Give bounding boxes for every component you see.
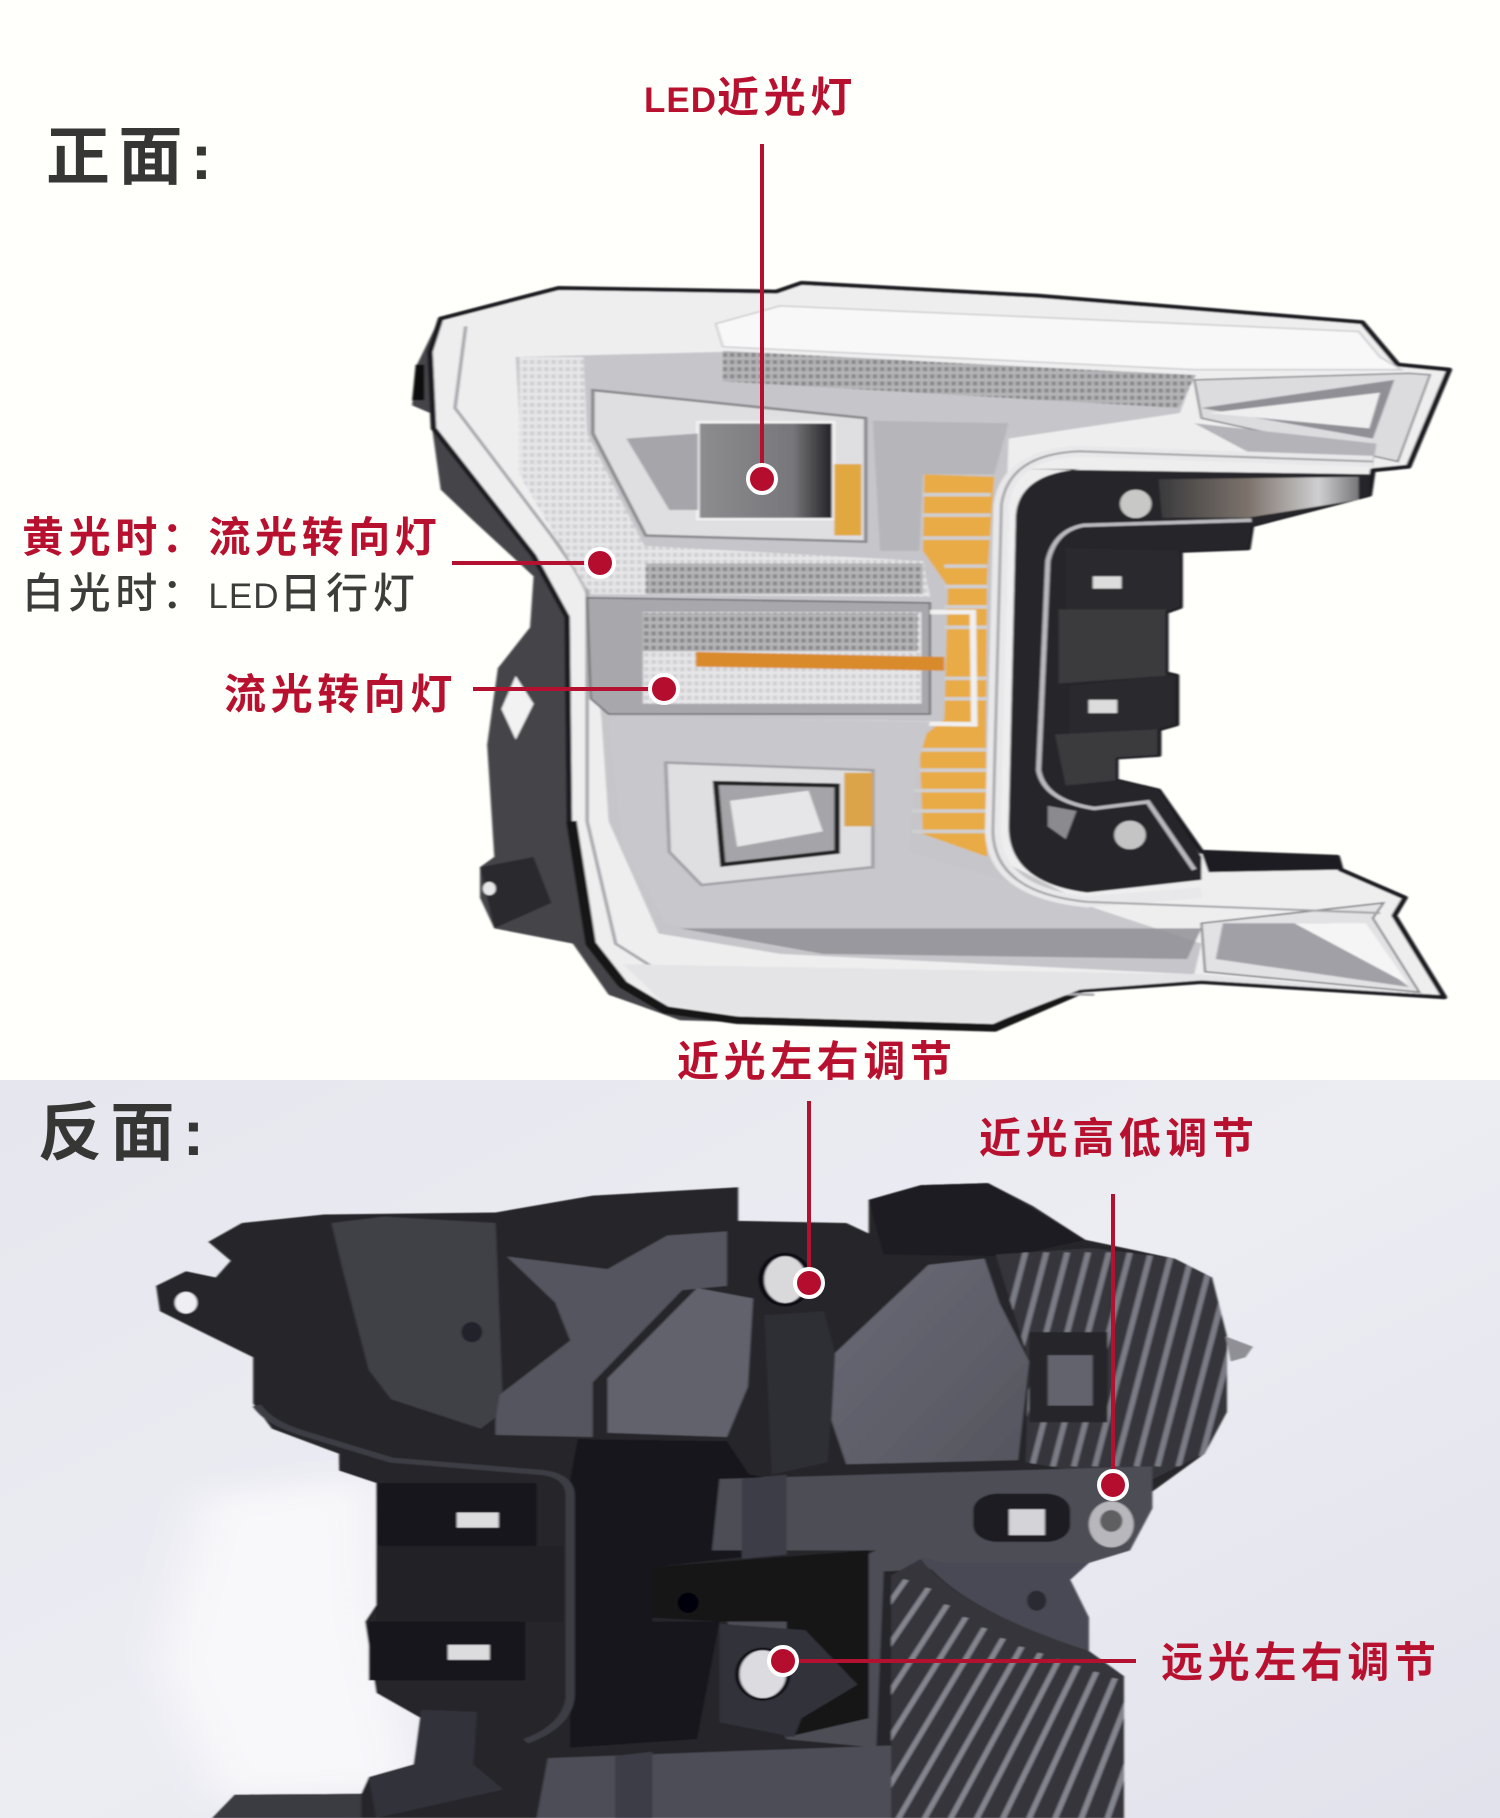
center-left panel (496, 1231, 727, 1437)
lower fine strip (680, 928, 1201, 959)
black mounting clip, lower (1069, 676, 1174, 734)
white tab, upper (457, 1513, 499, 1528)
marker dot (748, 465, 776, 493)
leader line (807, 1101, 811, 1274)
leader line (793, 1659, 1136, 1663)
left lobe (331, 1217, 503, 1429)
illustration: headlight front (412, 283, 1449, 1029)
vertical rib (764, 1311, 835, 1475)
connector (973, 1494, 1070, 1542)
panel: rear view background (0, 1080, 1500, 1818)
left diffuser panel (519, 357, 930, 597)
lower fin arc panel (921, 1557, 1089, 1651)
bottom clear lip (623, 964, 1430, 1023)
lower left bracket (369, 1710, 503, 1818)
inner chrome line (1039, 520, 1251, 870)
lower panel (537, 1745, 891, 1818)
right bolt (1225, 1336, 1253, 1361)
body between clips (1059, 609, 1166, 683)
adjuster knob: low beam horizontal (761, 1254, 809, 1305)
lower projector module (666, 763, 873, 885)
callout: low beam left-right adjust (677, 1038, 957, 1297)
heading: rear view: 反面: (38, 1097, 204, 1169)
callout: high beam left-right adjust (769, 1639, 1441, 1686)
inner reflector area (516, 352, 1201, 974)
body below clips (1055, 729, 1157, 786)
marker dot (1099, 1471, 1127, 1499)
upper chrome reflection (1159, 477, 1359, 518)
turn signal lens grid (643, 612, 921, 704)
left connector (480, 857, 551, 928)
chrome column (873, 421, 1009, 551)
callout: sequential turn signal (224, 671, 678, 718)
inner dark C interior (1009, 469, 1369, 893)
main body silhouette (156, 1183, 1227, 1818)
amber slats (912, 474, 994, 857)
marker dot (586, 549, 614, 577)
page background: front view (0, 0, 1500, 1080)
left chrome arch (455, 326, 1094, 995)
upper fins base (996, 1248, 1227, 1483)
amber accent, upper (834, 464, 861, 536)
heading: front view: 正面: (46, 121, 212, 193)
bracket plate (719, 1624, 858, 1737)
lower reflector (607, 717, 1198, 959)
center black channel (570, 1439, 779, 1748)
square sensor pad (1029, 1332, 1108, 1422)
lens silhouette (430, 283, 1449, 1028)
right clear wing, upper (1194, 373, 1430, 462)
chrome C bezel (993, 451, 1373, 902)
right panel (831, 1259, 1029, 1464)
amber turn bar (696, 652, 944, 671)
label: low beam height adjust: 近光高低调节 (979, 1115, 1259, 1162)
adjuster knob: low beam vertical (1089, 1501, 1134, 1547)
leader line (760, 144, 764, 470)
top clear band (716, 306, 1401, 370)
leader line (473, 687, 654, 691)
turn signal panel (587, 598, 930, 714)
upper projector module (593, 390, 866, 542)
lower black tab (212, 1794, 361, 1818)
clear light pipe (780, 612, 974, 724)
lower black ledge (1201, 852, 1341, 872)
amber accent, lower (844, 773, 873, 826)
white tab, upper (1093, 576, 1121, 589)
label: white mode: 白光时：LED日行灯 (22, 570, 419, 617)
tube outline (257, 1406, 570, 1741)
mounting eye (175, 1292, 197, 1314)
middle bracket (652, 1550, 869, 1737)
left lobe pivot (461, 1322, 482, 1342)
adjuster knob: high beam (737, 1649, 788, 1699)
upper DRL strip (723, 351, 1196, 408)
black clip, lower (369, 1622, 525, 1680)
label: high beam left-right adjust: 远光左右调节 (1161, 1639, 1441, 1686)
column ribs (742, 1475, 787, 1559)
left tab (412, 365, 424, 400)
housing: dark rear body (412, 316, 1080, 1029)
label: amber mode: 黄光时：流光转向灯 (22, 514, 441, 561)
lower right panel (712, 1466, 1152, 1748)
white tab, lower (448, 1645, 490, 1660)
arc panel hole (1027, 1591, 1046, 1611)
black mounting clip, upper (1066, 548, 1180, 612)
lower chrome reflection (1048, 806, 1076, 839)
black clip body (376, 1546, 563, 1622)
marker dot (650, 675, 678, 703)
marker dot (795, 1269, 823, 1297)
label: low beam left-right adjust: 近光左右调节 (677, 1038, 957, 1085)
mid strip (646, 564, 923, 594)
callout: LED low beam (644, 74, 857, 493)
lower fins (890, 1578, 1126, 1818)
label: LED low beam: LED近光灯 (644, 74, 857, 121)
callout: sequential turn / DRL (22, 514, 614, 617)
upper fins (1008, 1252, 1228, 1468)
lower fins base (891, 1559, 1124, 1818)
upper projector left fins (626, 433, 698, 510)
lower-left black lens edge (571, 821, 1080, 1028)
upper black shadow cover (869, 1183, 1085, 1257)
callout: low beam height adjust (979, 1115, 1259, 1499)
white tab, lower (1089, 700, 1117, 713)
screw, upper (1120, 490, 1151, 518)
right clear wing, lower (1201, 903, 1419, 992)
marker dot (769, 1647, 797, 1675)
plastic wrap (160, 1479, 414, 1798)
center panel (608, 1288, 753, 1437)
black clip, upper (376, 1483, 537, 1546)
bracket hole (678, 1593, 699, 1613)
label: sequential turn signal: 流光转向灯 (224, 671, 457, 718)
sensor inner (1048, 1355, 1093, 1406)
lower projector lens (716, 783, 837, 865)
illustration: headlight rear (156, 1183, 1255, 1818)
upper projector lens (698, 422, 834, 519)
connector pins (1009, 1509, 1045, 1535)
screw, lower (1114, 821, 1146, 849)
leader line (1111, 1194, 1115, 1476)
left side label sticker (501, 676, 534, 740)
leader line (452, 561, 590, 565)
